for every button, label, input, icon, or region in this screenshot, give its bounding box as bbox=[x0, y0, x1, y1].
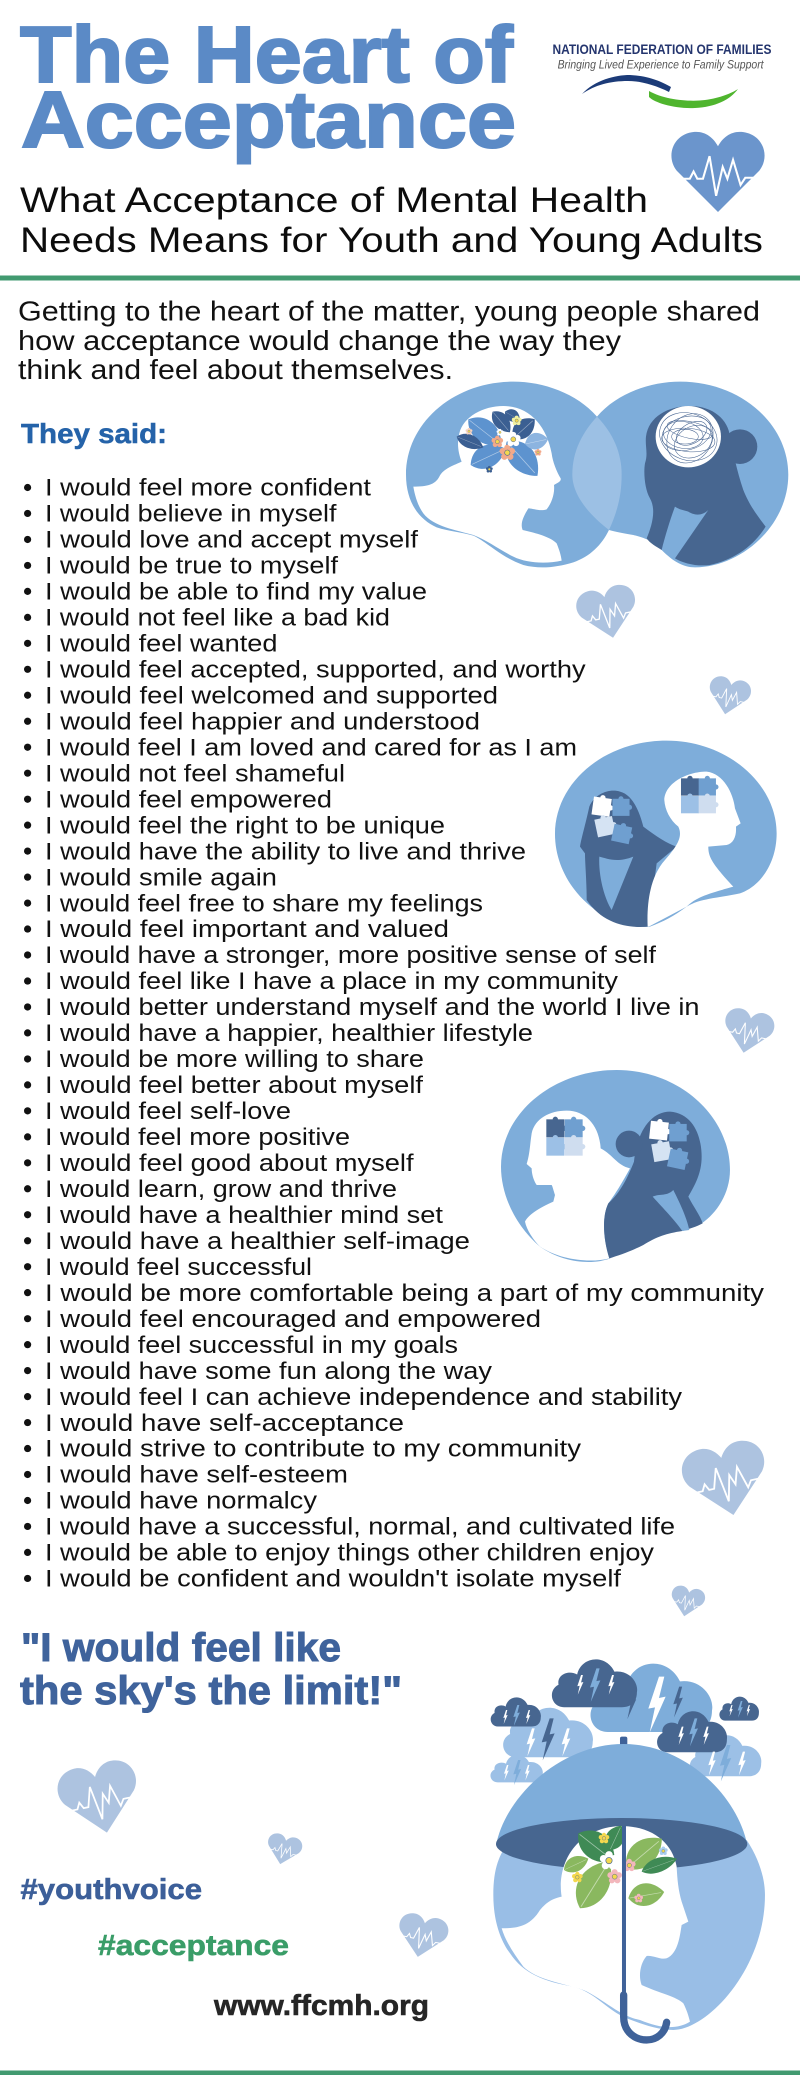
intro text bbox=[18, 296, 760, 385]
quote: the sky's the limit!" bbox=[20, 1669, 402, 1713]
list of statements: I would feel like I have a place in my community bbox=[45, 968, 618, 995]
list of statements: I would feel welcomed and supported bbox=[45, 682, 498, 709]
list of statements: I would feel wanted bbox=[45, 631, 278, 658]
list of statements: I would be true to myself bbox=[45, 553, 338, 580]
bullets bbox=[24, 484, 31, 1582]
list of statements: I would have self-acceptance bbox=[45, 1410, 404, 1437]
icon: small heart bbox=[668, 1584, 707, 1620]
list of statements: I would be able to find my value bbox=[45, 579, 427, 606]
list of statements: I would feel successful in my goals bbox=[45, 1332, 458, 1359]
green leaves and flowers bbox=[561, 1822, 679, 1916]
list of statements: I would learn, grow and thrive bbox=[45, 1176, 397, 1203]
icon: small heart bbox=[705, 674, 753, 719]
list of statements: I would believe in myself bbox=[45, 501, 337, 528]
list of statements: I would have some fun along the way bbox=[45, 1358, 492, 1385]
icon: small heart bbox=[573, 582, 642, 644]
list of statements: I would feel more positive bbox=[45, 1124, 350, 1151]
illustration: flowering mind and tangled mind bbox=[406, 382, 788, 567]
icon: small heart bbox=[719, 1006, 777, 1058]
list of statements: I would feel more confident bbox=[45, 475, 371, 502]
list of statements: I would have a stronger, more positive sense of self bbox=[45, 942, 656, 969]
subtitle: What Acceptance of Mental Health bbox=[20, 181, 648, 220]
logo: National Federation of Families bbox=[552, 42, 772, 108]
list of statements: I would better understand myself and the world I live in bbox=[45, 994, 700, 1021]
list of statements: I would have normalcy bbox=[45, 1488, 317, 1515]
title: The Heart of bbox=[20, 10, 513, 99]
icon: small heart bbox=[263, 1831, 304, 1868]
list of statements: I would strive to contribute to my community bbox=[45, 1436, 581, 1463]
icon: main heart with heartbeat bbox=[671, 132, 765, 212]
title bbox=[20, 10, 516, 164]
quote bbox=[20, 1626, 402, 1713]
list of statements: I would feel self-love bbox=[45, 1098, 291, 1125]
list of statements: I would be more willing to share bbox=[45, 1046, 424, 1073]
subtitle bbox=[20, 181, 763, 260]
list of statements: I would not feel like a bad kid bbox=[45, 605, 390, 632]
list of statements: I would feel happier and understood bbox=[45, 708, 480, 736]
hashtag: youthvoice: #youthvoice bbox=[20, 1874, 202, 1906]
list of statements: I would have a healthier self-image bbox=[45, 1228, 470, 1255]
list of statements bbox=[45, 475, 764, 1593]
heading: They said: They said: bbox=[21, 418, 167, 449]
umbrella shaft and handle bbox=[622, 1826, 667, 2040]
website: www.ffcmh.org bbox=[213, 1990, 429, 2022]
list of statements: I would have a happier, healthier lifestyle bbox=[45, 1020, 533, 1047]
list of statements: I would be able to enjoy things other children enjoy bbox=[45, 1540, 654, 1567]
list of statements: I would love and accept myself bbox=[45, 527, 418, 554]
storm clouds bbox=[490, 1659, 761, 1785]
list of statements: I would feel the right to be unique bbox=[45, 812, 445, 839]
list of statements: I would feel better about myself bbox=[45, 1072, 423, 1099]
list of statements: I would feel encouraged and empowered bbox=[45, 1306, 541, 1333]
list of statements: I would feel accepted, supported, and worthy bbox=[45, 656, 586, 684]
list of statements: I would smile again bbox=[45, 864, 277, 891]
subtitle: Needs Means for Youth and Young Adults bbox=[20, 221, 763, 260]
title: Acceptance bbox=[21, 75, 516, 164]
list of statements: I would feel empowered bbox=[45, 786, 332, 813]
logo: National Federation of Families: NATIONAL FEDERATION OF FAMILIES bbox=[552, 42, 772, 57]
intro text: think and feel about themselves. bbox=[18, 354, 453, 385]
illustration: two profiles with puzzle pieces (woman right) bbox=[501, 1070, 730, 1262]
intro text: how acceptance would change the way they bbox=[18, 325, 621, 356]
intro text: Getting to the heart of the matter, young people shared bbox=[18, 296, 760, 327]
list of statements: I would feel I can achieve independence and stability bbox=[45, 1384, 682, 1411]
list of statements: I would feel good about myself bbox=[45, 1150, 414, 1177]
list of statements: I would have a successful, normal, and cultivated life bbox=[45, 1514, 675, 1541]
hashtag: acceptance: #acceptance bbox=[98, 1930, 289, 1962]
list of statements: I would feel important and valued bbox=[45, 916, 449, 943]
head silhouette bbox=[493, 1737, 765, 2030]
icon: small heart bbox=[678, 1437, 774, 1524]
list of statements: I would have the ability to live and thrive bbox=[45, 838, 526, 865]
illustration: two profiles with puzzle pieces (woman left) bbox=[555, 741, 777, 927]
illustration: umbrella protecting a flowering mind bbox=[490, 1659, 765, 2040]
icon: small heart bbox=[54, 1756, 146, 1841]
list of statements: I would not feel shameful bbox=[45, 760, 345, 787]
list of statements: I would feel successful bbox=[45, 1254, 312, 1281]
list of statements: I would have self-esteem bbox=[45, 1462, 348, 1489]
icon: small heart bbox=[394, 1911, 451, 1962]
list of statements: I would have a healthier mind set bbox=[45, 1202, 443, 1229]
list of statements: I would feel free to share my feelings bbox=[45, 890, 483, 917]
list of statements: I would feel I am loved and cared for as I am bbox=[45, 734, 577, 761]
logo: National Federation of Families: Bringing Lived Experience to Family Support bbox=[558, 59, 764, 71]
list of statements: I would be more comfortable being a part of my community bbox=[45, 1280, 764, 1307]
quote: "I would feel like bbox=[21, 1626, 341, 1670]
list of statements: I would be confident and wouldn't isolate myself bbox=[45, 1566, 621, 1593]
